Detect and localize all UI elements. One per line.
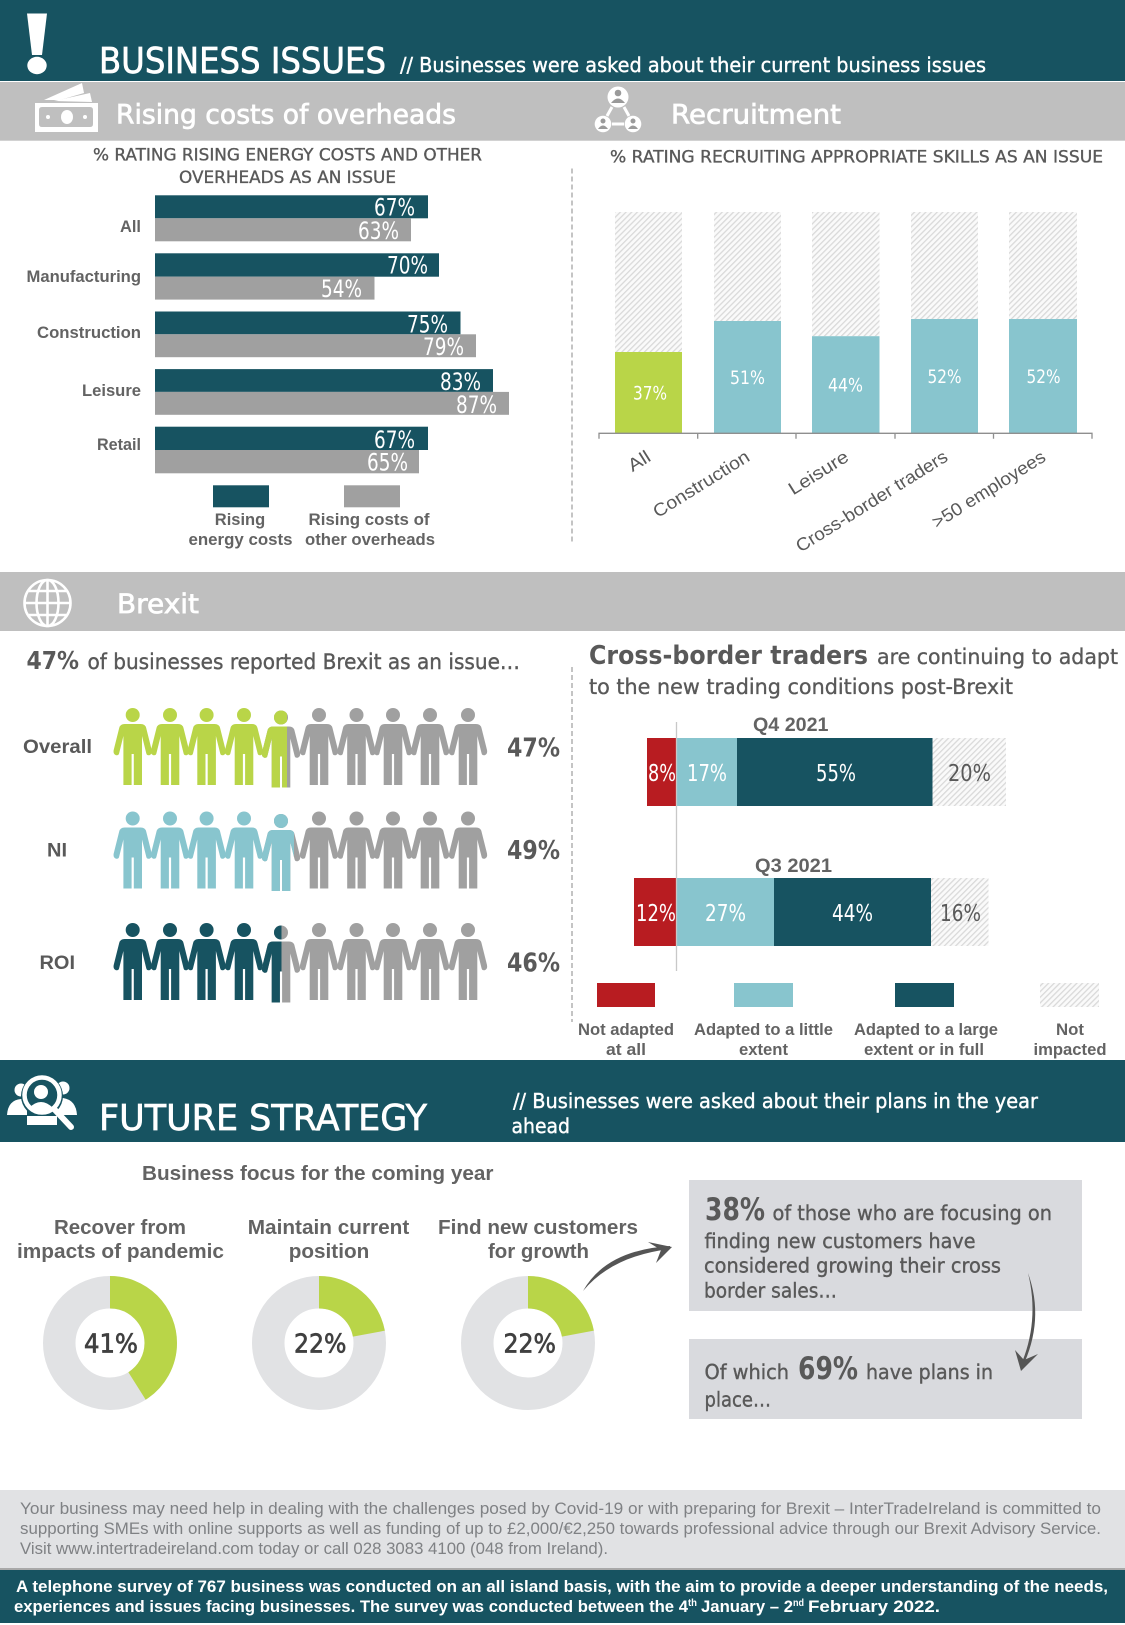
- heading: brexit: Brexit: [117, 589, 199, 620]
- panel: brexit pictograms: [23, 646, 560, 1002]
- icon: globe: [24, 580, 70, 626]
- pictogram row: NI: NI: [47, 840, 67, 862]
- bars: manufacturing: Manufacturing: [26, 268, 141, 286]
- arrow: first callout to second: [1015, 1273, 1038, 1371]
- callout: 69 percent: [689, 1339, 1082, 1419]
- column: leisure: 44%: [828, 374, 863, 396]
- bars: manufacturing: 54%: [321, 275, 362, 303]
- chart title: [93, 146, 482, 188]
- pictogram row: NI: [47, 812, 560, 891]
- pictogram row: overall: 47%: [507, 734, 560, 764]
- bars: all: All: [120, 218, 141, 236]
- donut: find new customers: [438, 1217, 638, 1394]
- axis labels: Construction: [649, 446, 753, 522]
- axis labels: Cross-border traders: [792, 446, 951, 556]
- axis labels: >50 employees: [928, 446, 1049, 532]
- heading: [589, 641, 1118, 699]
- heading: Cross-border traders: [589, 641, 868, 671]
- legend: Not: [1056, 1021, 1085, 1039]
- legend: Rising costs of: [308, 511, 430, 529]
- donut: recover from pandemic: [17, 1217, 224, 1394]
- bars: all: 67%: [374, 194, 415, 222]
- stacked bar: Q3 2021: 27%: [705, 901, 746, 927]
- column: cross-border traders: [911, 212, 978, 433]
- pictogram row: NI: 49%: [507, 836, 560, 866]
- bars: manufacturing: 70%: [387, 252, 428, 280]
- callout: 69 percent: Of which: [704, 1360, 789, 1384]
- footer: support message: [0, 1490, 1125, 1568]
- footer: survey note: nd: [793, 1598, 804, 1609]
- legend: Adapted to a large: [854, 1021, 998, 1039]
- stacked bar: Q3 2021: 16%: [940, 901, 981, 927]
- footer: support message: supporting SMEs with online supports as well as funding of up to £2,000/€2,250 towards professional advice through our Brexit Advisory Service.: [20, 1520, 1101, 1538]
- panel: rising costs bar chart: [26, 146, 509, 549]
- panel: recruitment column chart: [599, 148, 1103, 556]
- callout: 38 percent: [689, 1180, 1082, 1311]
- stacked bar: Q4 2021: 8%: [648, 761, 676, 787]
- heading: are continuing to adapt: [877, 645, 1118, 669]
- column: construction: [714, 212, 781, 433]
- bars: leisure: 83%: [440, 368, 481, 396]
- donut: maintain current position: position: [289, 1241, 369, 1263]
- legend: extent: [739, 1041, 788, 1059]
- callout: 38 percent: 38%: [705, 1192, 765, 1228]
- bars: construction: 75%: [407, 310, 448, 338]
- column: cross-border traders: 52%: [928, 366, 962, 388]
- legend: other overheads: [305, 531, 435, 549]
- stacked bar: Q3 2021: 12%: [636, 901, 676, 927]
- column: more than 50 employees: [1009, 212, 1077, 433]
- callout: 69 percent: have plans in: [866, 1360, 993, 1384]
- donut: find new customers: 22%: [504, 1330, 556, 1360]
- pictogram row: ROI: [40, 923, 560, 1002]
- bars: manufacturing: [26, 252, 439, 303]
- footer: support message: Your business may need help in dealing with the challenges posed by Covid-19 or with preparing for Brexit – InterTradeIreland is committed to: [20, 1500, 1101, 1518]
- icon: recruitment network: [595, 86, 641, 132]
- footer: survey note: January – 2: [701, 1598, 793, 1616]
- axis labels: Leisure: [785, 446, 852, 499]
- stacked bar: Q3 2021: [634, 856, 988, 946]
- legend: [578, 983, 1106, 1059]
- stacked bar: Q3 2021: Q3 2021: [755, 856, 832, 877]
- panel: cross-border traders stacked bars: [578, 641, 1118, 1059]
- footer: survey note: February 2022.: [808, 1598, 940, 1616]
- header: future strategy: [0, 1060, 1125, 1142]
- bars: leisure: Leisure: [82, 382, 141, 400]
- donut: find new customers: for growth: [488, 1241, 589, 1263]
- legend: energy costs: [188, 531, 292, 549]
- column: more than 50 employees: 52%: [1026, 366, 1060, 388]
- title: business issues: BUSINESS ISSUES: [99, 41, 386, 82]
- column: construction: 51%: [730, 367, 765, 389]
- header subtitle: // Businesses were asked about their plans in the year: [513, 1089, 1039, 1113]
- footer: support message: Visit www.intertradeireland.com today or call 028 3083 4100 (048 from Ireland).: [20, 1540, 608, 1558]
- title: future strategy: FUTURE STRATEGY: [99, 1098, 428, 1139]
- legend: impacted: [1034, 1041, 1106, 1059]
- bars: retail: 67%: [374, 426, 415, 454]
- legend: at all: [606, 1041, 646, 1059]
- axis labels: [624, 446, 1049, 556]
- column: all: 37%: [633, 382, 667, 404]
- axis labels: All: [624, 446, 654, 476]
- callout: 38 percent: of those who are focusing on: [772, 1201, 1052, 1225]
- callout: 38 percent: considered growing their cross: [704, 1254, 1001, 1278]
- footer: survey note: A telephone survey of 767 business was conducted on an all island basis, with the aim to provide a deeper understanding of the needs,: [16, 1578, 1108, 1596]
- header: business issues: [0, 0, 1125, 82]
- footer: survey note: [0, 1568, 1125, 1623]
- donut: recover from pandemic: impacts of pandemic: [17, 1241, 224, 1263]
- statement: 47 percent: of businesses reported Brexit as an issue…: [88, 650, 520, 674]
- bars: retail: 65%: [367, 449, 408, 477]
- section band: brexit: [0, 572, 1125, 631]
- bars: all: [120, 194, 428, 245]
- stacked bar: Q4 2021: Q4 2021: [753, 715, 829, 736]
- heading: recruitment: Recruitment: [671, 99, 841, 130]
- bars: all: 63%: [358, 217, 399, 245]
- header subtitle: [512, 1089, 1039, 1138]
- bars: construction: Construction: [37, 324, 141, 342]
- statement: 47 percent: 47%: [26, 646, 79, 675]
- bars: leisure: 87%: [456, 391, 497, 419]
- stacked bar: Q4 2021: 55%: [816, 761, 856, 787]
- donut: recover from pandemic: Recover from: [54, 1217, 186, 1239]
- header subtitle: ahead: [512, 1114, 570, 1138]
- pictogram row: ROI: ROI: [40, 953, 75, 974]
- header subtitle: // Businesses were asked about their current business issues: [400, 53, 986, 77]
- section heading: Business focus for the coming year: [142, 1163, 494, 1185]
- chart axis: [599, 433, 1092, 439]
- donut: maintain current position: 22%: [294, 1330, 346, 1360]
- footer: survey note: experiences and issues facing businesses. The survey was conducted between the 4: [14, 1598, 689, 1616]
- pictogram row: overall: Overall: [23, 737, 92, 758]
- section band: rising costs and recruitment: [0, 82, 1125, 141]
- heading: rising costs of overheads: Rising costs of overheads: [116, 99, 456, 130]
- donut: recover from pandemic: 41%: [84, 1330, 138, 1360]
- bars: construction: 79%: [423, 333, 464, 361]
- bars: construction: [37, 310, 476, 361]
- stacked bar: Q4 2021: 17%: [687, 761, 727, 787]
- bars: leisure: [82, 368, 509, 419]
- chart title: % RATING RECRUITING APPROPRIATE SKILLS AS AN ISSUE: [610, 148, 1103, 168]
- stacked bar: Q4 2021: 20%: [948, 761, 991, 787]
- donut: maintain current position: [248, 1217, 410, 1394]
- callout: 38 percent: finding new customers have: [704, 1229, 976, 1253]
- legend: [188, 485, 435, 549]
- icon: banknotes: [35, 83, 98, 132]
- chart title: % RATING RISING ENERGY COSTS AND OTHER: [93, 146, 482, 166]
- callout: 69 percent: 69%: [798, 1351, 858, 1387]
- chart title: OVERHEADS AS AN ISSUE: [179, 168, 396, 188]
- arrow: donut to callout: [583, 1242, 672, 1291]
- legend: Not adapted: [578, 1021, 674, 1039]
- donut: maintain current position: Maintain current: [248, 1217, 410, 1239]
- icon: magnifier over people: [7, 1075, 77, 1127]
- footer: survey note: th: [688, 1598, 697, 1609]
- callout: 69 percent: place…: [704, 1388, 771, 1412]
- legend: Rising: [215, 511, 265, 529]
- stacked bar: Q3 2021: 44%: [832, 901, 873, 927]
- callout: 38 percent: border sales…: [704, 1278, 837, 1302]
- column: all: [615, 212, 682, 433]
- bars: retail: [97, 426, 428, 477]
- column: leisure: [812, 212, 880, 433]
- pictogram row: overall: [23, 708, 560, 788]
- icon: exclamation mark: [27, 14, 47, 74]
- donut: find new customers: Find new customers: [438, 1217, 638, 1239]
- panel: business focus donuts: [17, 1163, 638, 1394]
- bars: retail: Retail: [97, 436, 141, 454]
- pictogram row: ROI: 46%: [507, 948, 560, 978]
- stacked bar: Q4 2021: [647, 715, 1006, 806]
- heading: to the new trading conditions post-Brexit: [589, 675, 1013, 699]
- legend: Adapted to a little: [694, 1021, 833, 1039]
- legend: extent or in full: [864, 1041, 984, 1059]
